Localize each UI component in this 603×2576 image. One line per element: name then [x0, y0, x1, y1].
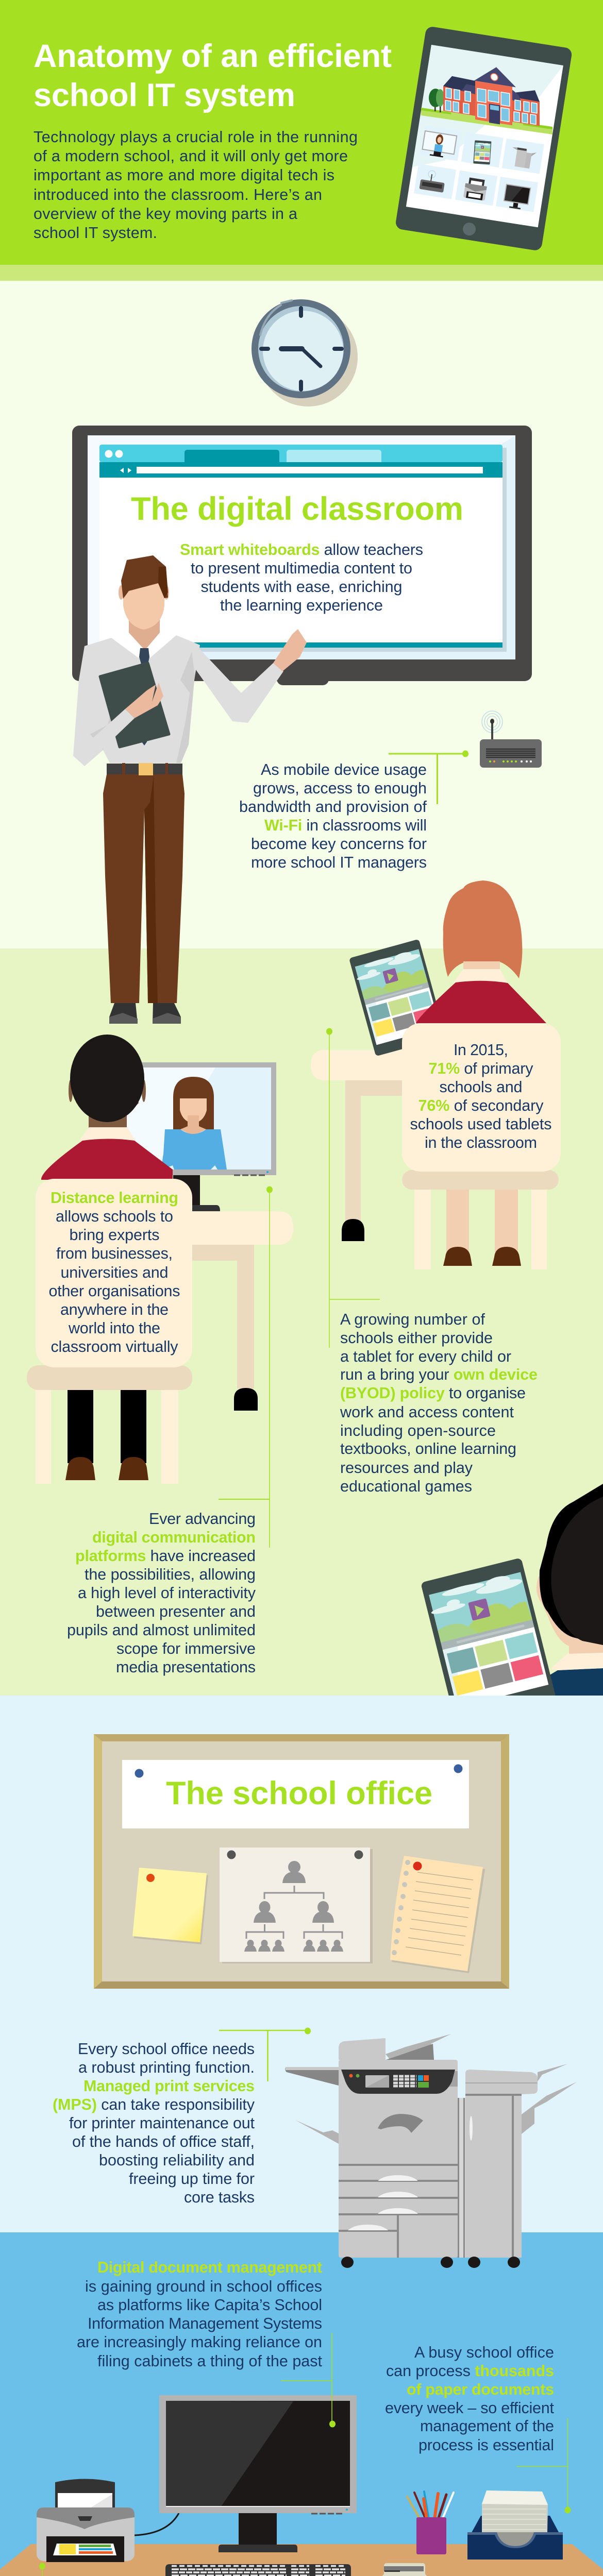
text: byod: run a bring your own device — [340, 1366, 538, 1383]
icon: computer monitor — [135, 2395, 357, 2552]
text: digital communication platforms: between presenter and — [96, 1603, 256, 1620]
monitor — [173, 1175, 200, 1205]
text: tablets statistic: 71% of primary — [429, 1060, 533, 1077]
text: wifi: bandwidth and provision of — [239, 798, 427, 816]
text: digital communication platforms: scope for immersive — [116, 1640, 256, 1657]
text: tablets statistic — [410, 1041, 551, 1151]
icon: tablet showing school — [395, 26, 573, 251]
text: managed print services — [53, 2040, 255, 2206]
text: distance learning: universities and — [61, 1264, 168, 1281]
text: digital communication platforms: digital communication — [92, 1529, 256, 1546]
text: digital communication platforms: pupils and almost unlimited — [67, 1621, 256, 1639]
text: thousands of paper documents: process is essential — [418, 2436, 554, 2454]
neck and collar — [129, 613, 160, 656]
text: thousands of paper documents — [385, 2344, 555, 2454]
icon: document tray — [467, 2490, 563, 2560]
text: tablets statistic: schools used tablets — [410, 1115, 551, 1133]
shoes — [109, 1003, 138, 1024]
illustration: student at video monitor — [27, 1035, 293, 1484]
sticky note — [132, 1868, 208, 1944]
text: distance learning: from businesses, — [56, 1245, 173, 1262]
text: distance learning: bring experts — [69, 1226, 160, 1244]
callout line: byod — [326, 1028, 380, 1348]
text: byod — [340, 1311, 538, 1495]
text: wifi: become key concerns for — [251, 835, 427, 853]
text: byod: (BYOD) policy to organise — [340, 1384, 526, 1402]
presenter on screen — [173, 1077, 214, 1129]
text: thousands of paper documents: management of the — [420, 2417, 554, 2435]
legs and chair — [36, 1386, 51, 1484]
text: smart whiteboards: students with ease, enriching — [201, 578, 402, 596]
text: digital communication platforms: platforms have increased — [75, 1547, 256, 1565]
right arm — [196, 645, 283, 723]
mini copier — [510, 147, 537, 170]
text: smart whiteboards: Smart whiteboards allow teachers — [180, 541, 423, 558]
org chart paper — [220, 1848, 373, 1963]
text: managed print services: for printer maintenance out — [69, 2114, 255, 2132]
interactive whiteboard — [72, 426, 532, 685]
text: digital document management: as platforms like Capita’s School — [97, 2296, 322, 2314]
text: distance learning: Distance learning — [51, 1189, 178, 1207]
text: wifi: grows, access to enough — [253, 779, 427, 797]
intro text: of a modern school, and it will only get more — [34, 147, 348, 165]
text: thousands of paper documents: A busy school office — [414, 2344, 554, 2361]
text: wifi: more school IT managers — [251, 854, 427, 871]
mini router — [419, 169, 446, 193]
title — [34, 38, 392, 113]
left forearm and hand — [73, 709, 135, 766]
intro text: important as more and more digital tech is — [34, 166, 334, 184]
mini black monitor — [502, 184, 531, 211]
tie — [139, 648, 149, 745]
text: digital communication platforms: media presentations — [116, 1658, 256, 1676]
text: byod: A growing number of — [340, 1311, 485, 1328]
text: byod: educational games — [340, 1478, 472, 1495]
callout line: scanning — [39, 2563, 93, 2576]
text: managed print services: core tasks — [184, 2189, 255, 2206]
callout line: monitor — [281, 2333, 336, 2428]
text: smart whiteboards: to present multimedia content to — [191, 560, 412, 577]
mini tablet — [473, 140, 491, 164]
tablet — [349, 939, 446, 1056]
intro text: Technology plays a crucial role in the running — [34, 128, 358, 146]
intro text: overview of the key moving parts in a — [34, 205, 297, 223]
text: tablets statistic: schools and — [439, 1078, 523, 1096]
text: digital document management — [77, 2259, 323, 2370]
panel: school office — [0, 1696, 603, 2576]
icon: pencil cup — [407, 2492, 454, 2554]
intro text — [34, 128, 358, 242]
text: wifi — [239, 761, 427, 871]
text: thousands of paper documents: of paper documents — [407, 2381, 554, 2398]
desk — [192, 1245, 254, 1388]
lined paper — [390, 1856, 485, 1973]
text: byod: schools either provide — [340, 1329, 493, 1347]
text: distance learning: world into the — [68, 1319, 160, 1337]
callout line: printing — [219, 2028, 311, 2081]
text: tablets statistic: In 2015, — [454, 1041, 508, 1059]
text: distance learning — [48, 1189, 180, 1355]
text: byod: textbooks, online learning — [340, 1440, 516, 1458]
panel: digital classroom — [0, 281, 603, 1724]
trousers — [103, 774, 185, 1003]
hair — [443, 880, 522, 978]
text: managed print services: Every school office needs — [78, 2040, 255, 2058]
text: byod: a tablet for every child or — [340, 1348, 511, 1365]
text: thousands of paper documents: every week – so efficient — [385, 2399, 555, 2417]
icon: wifi router — [480, 711, 542, 768]
illustration: teacher — [73, 555, 307, 1024]
school building — [421, 59, 552, 134]
belt — [107, 764, 182, 774]
illustration: pupil holding tablet — [421, 1484, 603, 1724]
text: distance learning: allows schools to — [56, 1208, 173, 1225]
text: digital document management: Digital document management — [97, 2259, 322, 2276]
illustration: student with tablet — [311, 880, 561, 1269]
head — [119, 585, 124, 600]
text: digital communication platforms: a high level of interactivity — [78, 1584, 256, 1602]
text: distance learning: anywhere in the — [60, 1301, 169, 1318]
text: distance learning: other organisations — [48, 1282, 180, 1300]
legs and stool — [414, 1185, 431, 1269]
intro text: introduced into the classroom. Here’s an — [34, 186, 322, 204]
torso — [73, 635, 200, 766]
text: digital document management: filing cabinets a thing of the past — [97, 2352, 323, 2370]
chair back — [402, 1023, 561, 1172]
title: Anatomy of an efficient — [34, 38, 392, 74]
text: digital communication platforms: the possibilities, allowing — [85, 1566, 256, 1583]
student — [69, 1079, 73, 1102]
text: managed print services: a robust printing function. — [78, 2059, 255, 2076]
text: digital communication platforms: Ever advancing — [149, 1510, 256, 1528]
text: byod: work and access content — [340, 1403, 514, 1421]
mini monitor — [422, 131, 457, 159]
icon: printer scanner — [37, 2479, 135, 2562]
text: wifi: As mobile device usage — [261, 761, 427, 778]
text: digital document management: is gaining ground in school offices — [85, 2278, 322, 2295]
text: digital document management: are increasingly making reliance on — [77, 2333, 322, 2351]
text: digital document management: Information Management Systems — [88, 2315, 322, 2332]
title: school IT system — [34, 77, 295, 113]
text: smart whiteboards: the learning experience — [220, 597, 383, 614]
callout line: communication platforms — [219, 1186, 273, 1548]
illustration: photocopier — [285, 2034, 577, 2268]
text: thousands of paper documents: can process thousands — [386, 2362, 554, 2380]
intro text: school IT system. — [34, 224, 157, 242]
text: managed print services: of the hands of office staff, — [72, 2133, 255, 2150]
text: byod: resources and play — [340, 1459, 473, 1477]
text: digital communication platforms — [67, 1510, 256, 1676]
icon: wall clock — [252, 299, 358, 406]
text: wifi: Wi-Fi in classrooms will — [264, 817, 427, 834]
sign — [122, 1760, 469, 1828]
text: managed print services: Managed print services — [83, 2077, 255, 2095]
text: byod: including open-source — [340, 1422, 496, 1439]
text: managed print services: freeing up time for — [129, 2170, 255, 2188]
book — [100, 663, 169, 747]
icon: calculator — [376, 2563, 433, 2576]
text: managed print services: boosting reliability and — [99, 2151, 255, 2169]
noticeboard — [94, 1734, 509, 1989]
callout line: wifi — [389, 750, 468, 804]
illustration: desk — [0, 2544, 603, 2576]
text: tablets statistic: 76% of secondary — [418, 1097, 544, 1114]
heading: the school office: The school office — [166, 1775, 432, 1811]
text: tablets statistic: in the classroom — [425, 1134, 537, 1151]
text: smart whiteboards — [180, 541, 423, 614]
callout line: paper documents — [516, 2418, 571, 2513]
heading: the digital classroom: The digital classroom — [131, 491, 463, 527]
mini printer — [463, 177, 488, 201]
desk — [345, 1080, 402, 1223]
icon: keyboard — [165, 2564, 351, 2576]
text: managed print services: (MPS) can take responsibility — [53, 2096, 255, 2113]
text: distance learning: classroom virtually — [51, 1338, 178, 1355]
